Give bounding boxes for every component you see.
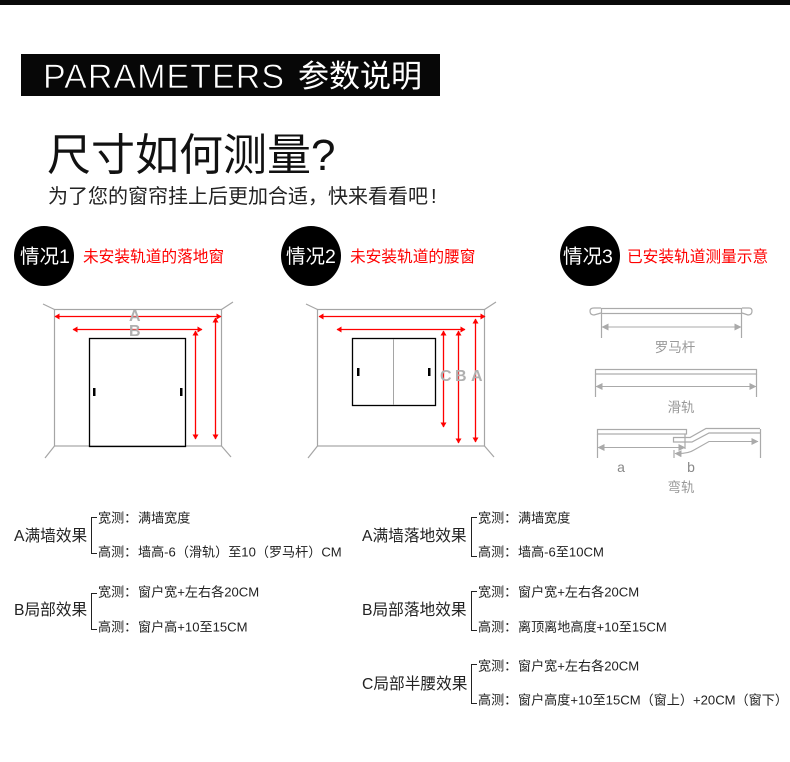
case 2 heading: 未安装轨道的腰窗 xyxy=(350,248,476,266)
spec: B partial floor-length: 窗户宽+左右各20CM xyxy=(518,584,639,600)
diagram: curved rail: a xyxy=(617,459,625,475)
diagram: slide rail: 滑轨 xyxy=(668,400,695,415)
case 1 heading: 情况1 xyxy=(20,246,70,268)
spec: A full-wall floor-length: 高测： xyxy=(478,544,517,560)
spec: A full-wall floor-length: 宽测： xyxy=(478,510,517,526)
spec: B partial: 窗户宽+左右各20CM xyxy=(138,584,259,600)
diagram: sill window: A xyxy=(471,368,483,385)
spec: B partial: B局部效果 xyxy=(14,601,88,619)
case 2 heading: 情况2 xyxy=(286,246,336,268)
case 1 heading xyxy=(14,226,224,286)
spec: A full-wall: 满墙宽度 xyxy=(138,510,190,526)
spec: C partial half-height xyxy=(362,658,788,708)
spec: C partial half-height: C局部半腰效果 xyxy=(362,675,468,693)
diagram: sill window: C xyxy=(440,368,452,385)
case 2 heading xyxy=(281,226,476,286)
spec: A full-wall floor-length: 满墙宽度 xyxy=(518,510,570,526)
diagram: curved rail xyxy=(598,428,760,495)
diagram: roman rod xyxy=(590,308,752,355)
spec: A full-wall xyxy=(14,510,342,560)
diagram: floor-length window: B xyxy=(129,323,141,340)
spec: C partial half-height: 窗户高度+10至15CM（窗上）+20CM（窗下） xyxy=(518,692,788,708)
diagram: curved rail: 弯轨 xyxy=(668,479,695,495)
diagram: floor-length window xyxy=(43,302,233,458)
spec: A full-wall: 墙高-6（滑轨）至10（罗马杆）CM xyxy=(138,544,342,560)
spec: C partial half-height: 高测： xyxy=(478,692,517,708)
spec: A full-wall: 高测： xyxy=(98,544,137,560)
spec: C partial half-height: 窗户宽+左右各20CM xyxy=(518,658,639,674)
diagram: roman rod: 罗马杆 xyxy=(655,340,696,355)
spec: A full-wall floor-length: 墙高-6至10CM xyxy=(518,544,604,560)
spec: A full-wall floor-length: A满墙落地效果 xyxy=(362,527,467,545)
diagram: sill window xyxy=(306,302,496,458)
spec: B partial floor-length: 宽测： xyxy=(478,584,517,600)
spec: B partial floor-length: B局部落地效果 xyxy=(362,601,467,619)
section banner: parameters xyxy=(21,54,440,96)
case 3 heading xyxy=(560,226,768,286)
case 3 heading: 情况3 xyxy=(563,246,613,268)
section banner: parameters: PARAMETERS xyxy=(43,58,284,96)
subtitle: 为了您的窗帘挂上后更加合适，快来看看吧! xyxy=(48,185,437,208)
spec: B partial: 窗户高+10至15CM xyxy=(138,618,248,634)
section banner: parameters: 参数说明 xyxy=(298,59,422,94)
diagram: sill window: B xyxy=(455,368,467,385)
spec: A full-wall floor-length xyxy=(362,510,604,560)
spec: B partial: 宽测： xyxy=(98,584,137,600)
spec: C partial half-height: 宽测： xyxy=(478,658,517,674)
spec: B partial: 高测： xyxy=(98,618,137,634)
case 3 heading: 已安装轨道测量示意 xyxy=(627,247,768,266)
spec: A full-wall: 宽测： xyxy=(98,510,137,526)
spec: B partial xyxy=(14,584,259,634)
spec: B partial floor-length: 高测： xyxy=(478,618,517,634)
spec: B partial floor-length: 离顶离地高度+10至15CM xyxy=(518,618,667,634)
diagram: slide rail xyxy=(596,370,756,415)
title: 尺寸如何测量? xyxy=(47,131,335,180)
diagram: floor-length window: A xyxy=(129,308,141,325)
spec: B partial floor-length xyxy=(362,584,667,634)
top black bar xyxy=(0,0,790,5)
diagram: curved rail: b xyxy=(687,459,695,475)
case 1 heading: 未安装轨道的落地窗 xyxy=(83,248,224,266)
spec: A full-wall: A满墙效果 xyxy=(14,527,88,545)
